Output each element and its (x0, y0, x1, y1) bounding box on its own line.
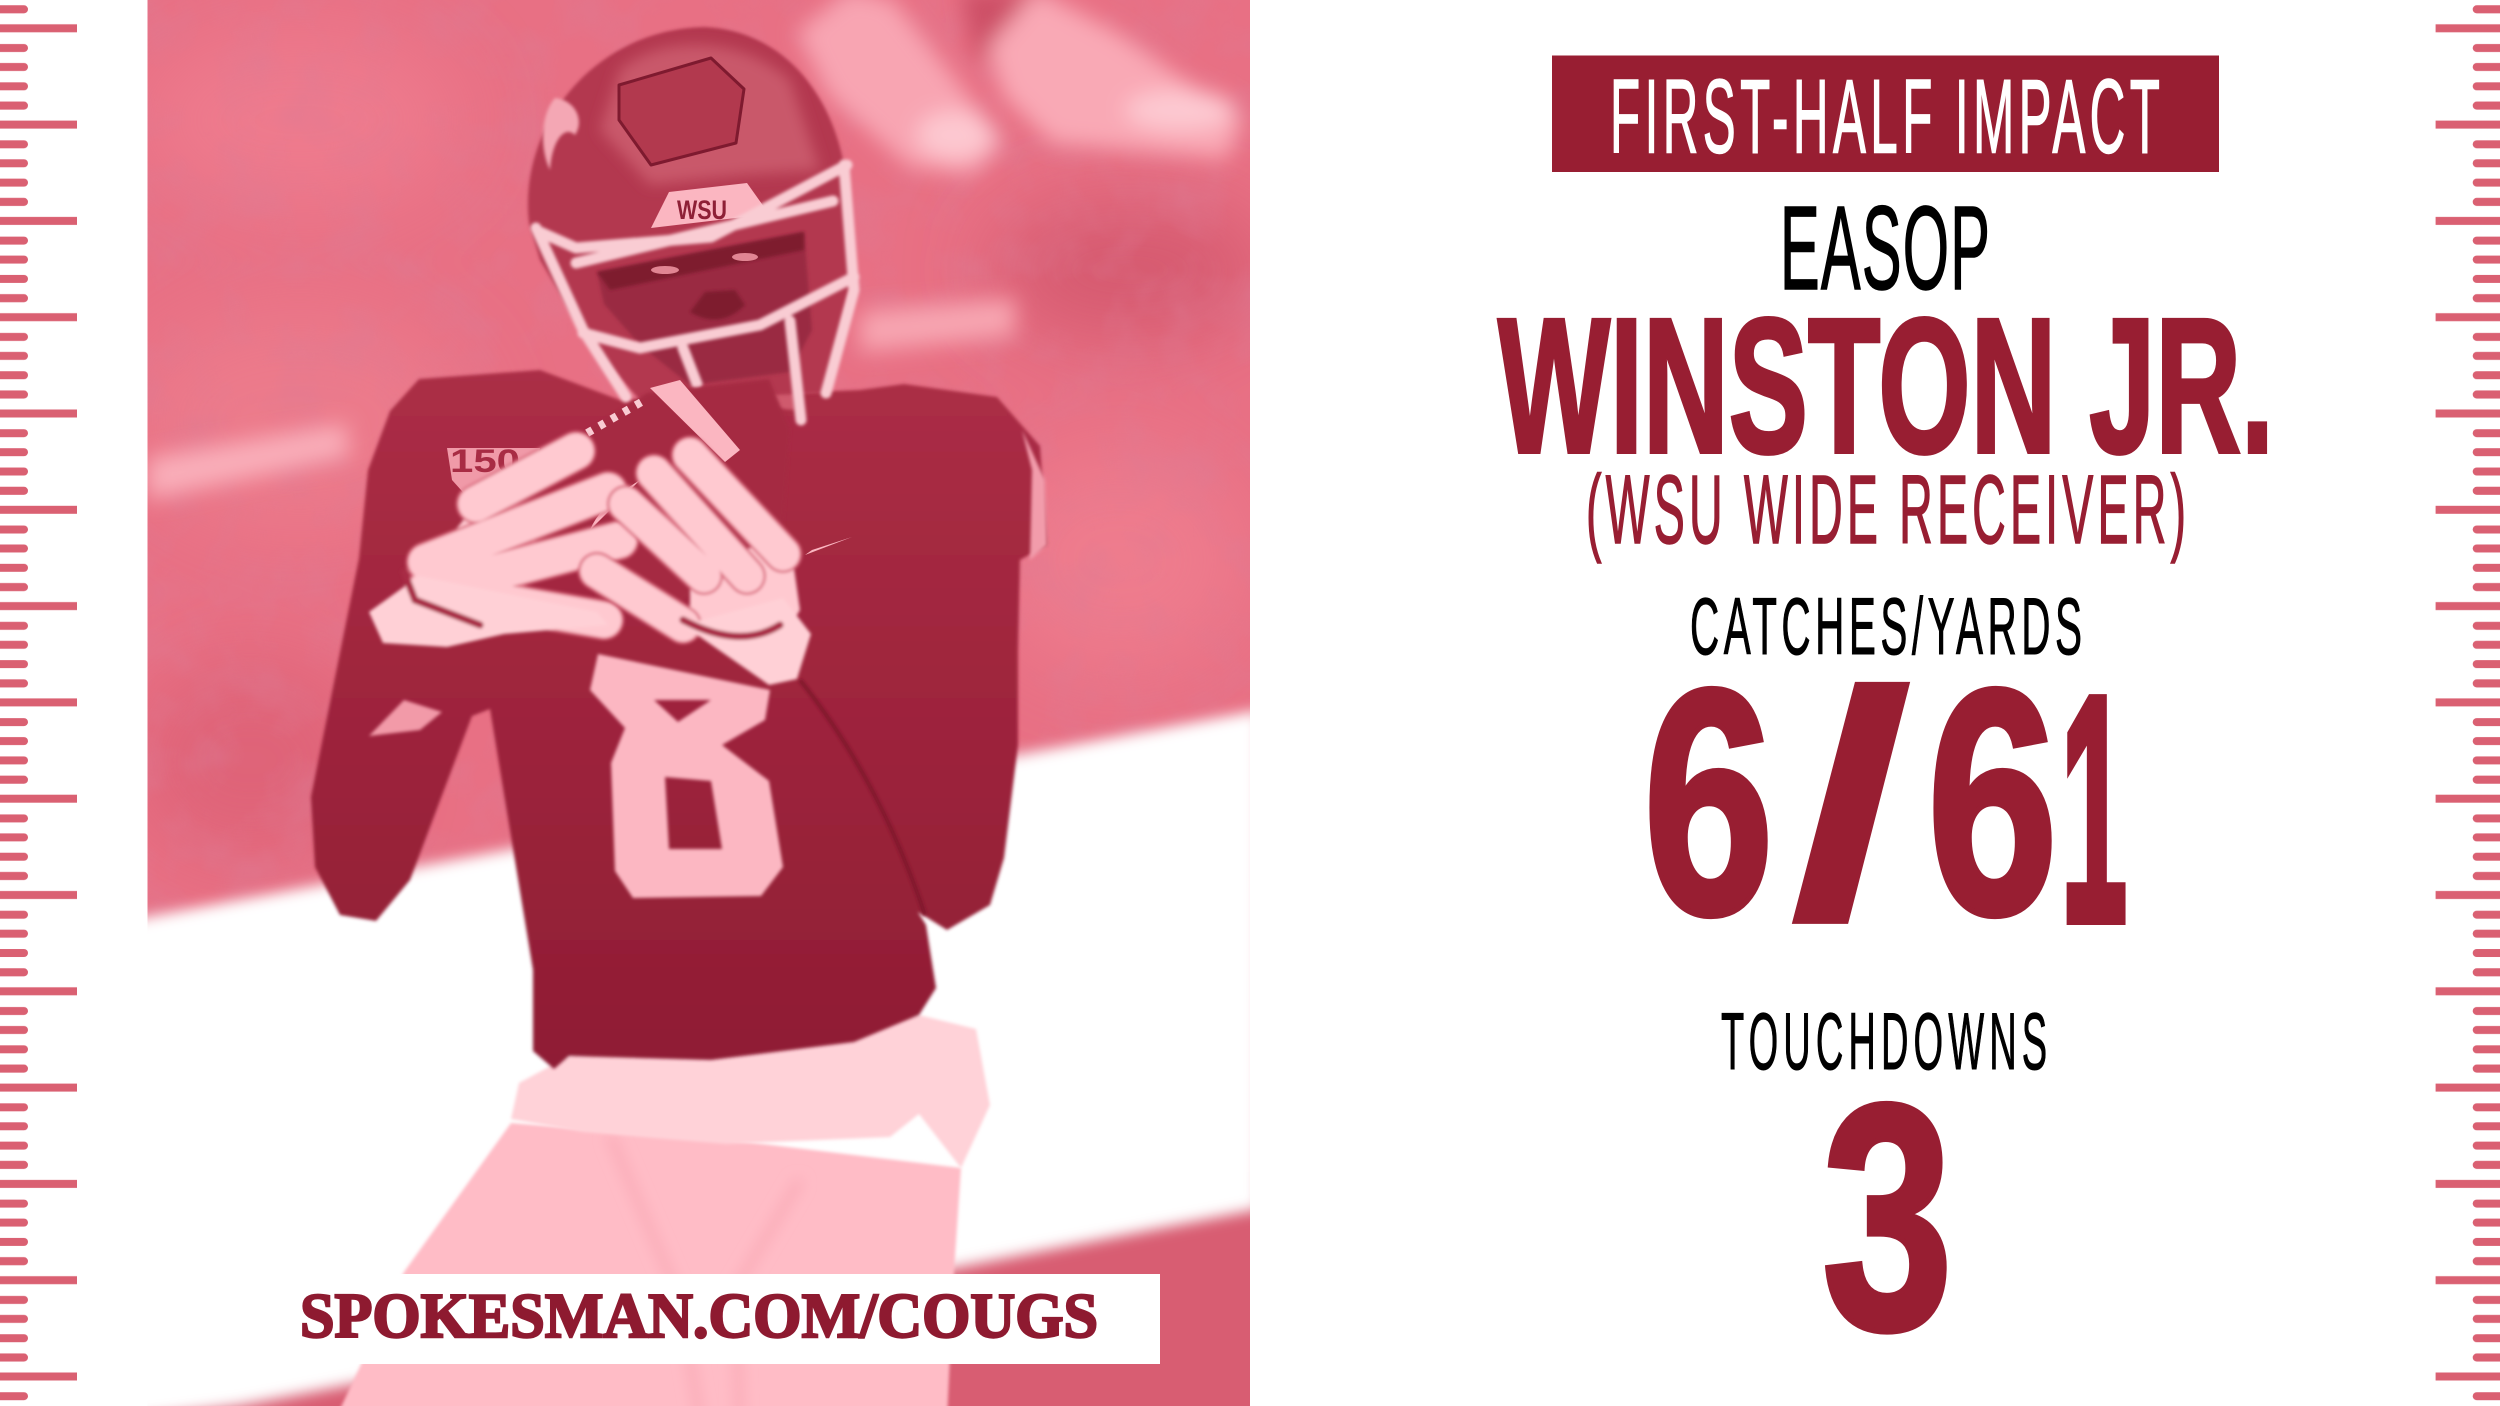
player: undershirt (511, 1015, 990, 1168)
player: pants seam shading (610, 1135, 800, 1406)
player: helmet shell (528, 27, 852, 400)
player: jersey number 8 (590, 654, 783, 898)
left yard-line tick marks (0, 0, 100, 1406)
right yard-line tick marks (2400, 0, 2500, 1406)
player: helmet hexagon panel (619, 58, 744, 165)
website banner: SPOKESMAN.COM/COUGS (300, 1280, 1098, 1351)
player: helmet highlight (600, 45, 820, 185)
photo background: blurred field and turf (130, 0, 1270, 1406)
player: nose and mouth (690, 290, 745, 320)
player: arm patch (369, 700, 442, 736)
label: catches and yards: CATCHES/YARDS (1690, 581, 2082, 672)
player: helmet logo (543, 98, 579, 170)
player: face mask bars (536, 165, 854, 420)
panel: duotone player photo (130, 0, 1270, 1406)
player: neck (775, 394, 794, 411)
stat: 6/61: 6 (1927, 623, 2058, 982)
player: helmet WSU plate (651, 183, 769, 228)
player: eyes (651, 253, 758, 274)
player: right glove (597, 455, 811, 685)
stat: 3: 3 (1822, 1038, 1953, 1397)
player: 150 shoulder patch (447, 448, 540, 492)
player: 150 shoulder patch: 150 (450, 443, 520, 479)
blurred shoes in the background (147, 0, 1243, 500)
player: brow shadow (597, 232, 804, 290)
label: touchdowns: TOUCHDOWNS (1721, 997, 2047, 1087)
player first name: EASOP (1780, 181, 1990, 314)
player position: (WSU WIDE RECEIVER) (1586, 456, 2186, 565)
player: pants (335, 1123, 961, 1406)
player: jersey sleeve highlight (1022, 430, 1047, 560)
stat: 6/61: 6 (1643, 623, 1774, 982)
player: helmet WSU plate: WSU (677, 195, 727, 225)
player: ball swoosh (590, 480, 640, 530)
player: left glove (369, 451, 619, 647)
player: football laces (585, 399, 643, 436)
player: football stripe (650, 380, 740, 462)
player: football (626, 380, 782, 411)
text: 1 (2061, 630, 2127, 989)
stat: 6/61 (1643, 623, 2127, 989)
player: face (597, 232, 812, 385)
stat: 6/61: / (1790, 626, 1913, 985)
player: jersey torso, shoulders and arms (311, 370, 1047, 1069)
player: jersey swoosh (805, 537, 852, 555)
player: arm crease on the right (800, 680, 925, 915)
title banner: FIRST-HALF IMPACT (1610, 59, 2160, 176)
